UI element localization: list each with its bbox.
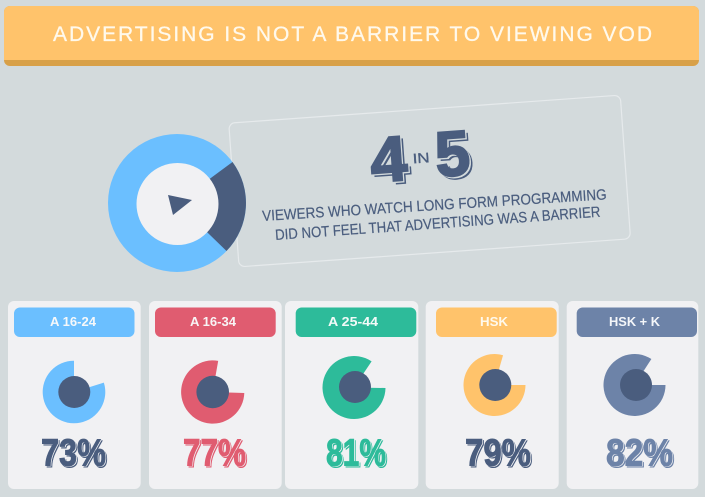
value: 81%: 81% bbox=[326, 432, 386, 474]
icon: play triangle bbox=[168, 195, 192, 215]
label: A 25-44 bbox=[296, 308, 416, 337]
stat: 4 in 5: 4 bbox=[368, 122, 410, 196]
value: 73%: 73% bbox=[42, 433, 107, 475]
stat: 4 in 5: 4 bbox=[371, 125, 413, 199]
value: 82%: 82% bbox=[608, 434, 674, 476]
callout panel: 4 in 5 bbox=[229, 95, 631, 267]
value: 79%: 79% bbox=[465, 432, 531, 474]
panel: HSK bbox=[426, 301, 559, 489]
main donut chart with play icon bbox=[108, 134, 246, 272]
donut: 82% bbox=[604, 354, 666, 416]
panel: HSK + K bbox=[567, 301, 698, 489]
value: 77%: 77% bbox=[184, 434, 248, 476]
stat: 4 in 5: 4 bbox=[369, 123, 412, 198]
stat: 4 in 5: 5 bbox=[436, 119, 476, 194]
donut: 79% bbox=[464, 354, 526, 416]
panel: A 16-24 bbox=[8, 301, 141, 489]
label: A 25-44: A 25-44 bbox=[328, 314, 379, 329]
value: 73%: 73% bbox=[41, 432, 106, 474]
label: HSK + K bbox=[577, 308, 697, 337]
value: 81%: 81% bbox=[328, 434, 388, 476]
donut: 81% bbox=[323, 356, 386, 419]
stat: 4 in 5: IN bbox=[412, 149, 430, 167]
label: HSK bbox=[436, 308, 557, 337]
donut: 77% bbox=[181, 360, 244, 424]
description text: VIEWERS WHO WATCH LONG FORM PROGRAMMING bbox=[262, 186, 607, 225]
description text: DID NOT FEEL THAT ADVERTISING WAS A BARRIER bbox=[275, 204, 601, 244]
value: 82%: 82% bbox=[607, 433, 674, 475]
panel: A 25-44 bbox=[285, 301, 418, 489]
title banner bbox=[4, 6, 699, 66]
title: ADVERTISING IS NOT A BARRIER TO VIEWING VOD bbox=[53, 23, 652, 46]
donut: 73% bbox=[43, 361, 105, 423]
description text bbox=[262, 186, 607, 244]
label: HSK: HSK bbox=[480, 314, 509, 329]
stat: 4 in 5: 5 bbox=[432, 117, 472, 191]
value: 79%: 79% bbox=[466, 434, 532, 476]
value: 79%: 79% bbox=[466, 433, 532, 475]
value: 81%: 81% bbox=[327, 433, 387, 475]
stat: 4 in 5: 5 bbox=[434, 118, 474, 192]
label: A 16-34 bbox=[155, 308, 276, 337]
value: 73%: 73% bbox=[42, 434, 108, 476]
label: A 16-24 bbox=[14, 308, 134, 337]
stat: 4 in 5 bbox=[367, 116, 476, 199]
panel: A 16-34 bbox=[149, 301, 282, 489]
value: 77%: 77% bbox=[184, 433, 247, 475]
value: 77%: 77% bbox=[183, 432, 246, 474]
label: A 16-34: A 16-34 bbox=[190, 314, 237, 329]
label: HSK + K: HSK + K bbox=[609, 314, 661, 329]
label: A 16-24: A 16-24 bbox=[50, 314, 97, 329]
value: 82%: 82% bbox=[606, 432, 673, 474]
